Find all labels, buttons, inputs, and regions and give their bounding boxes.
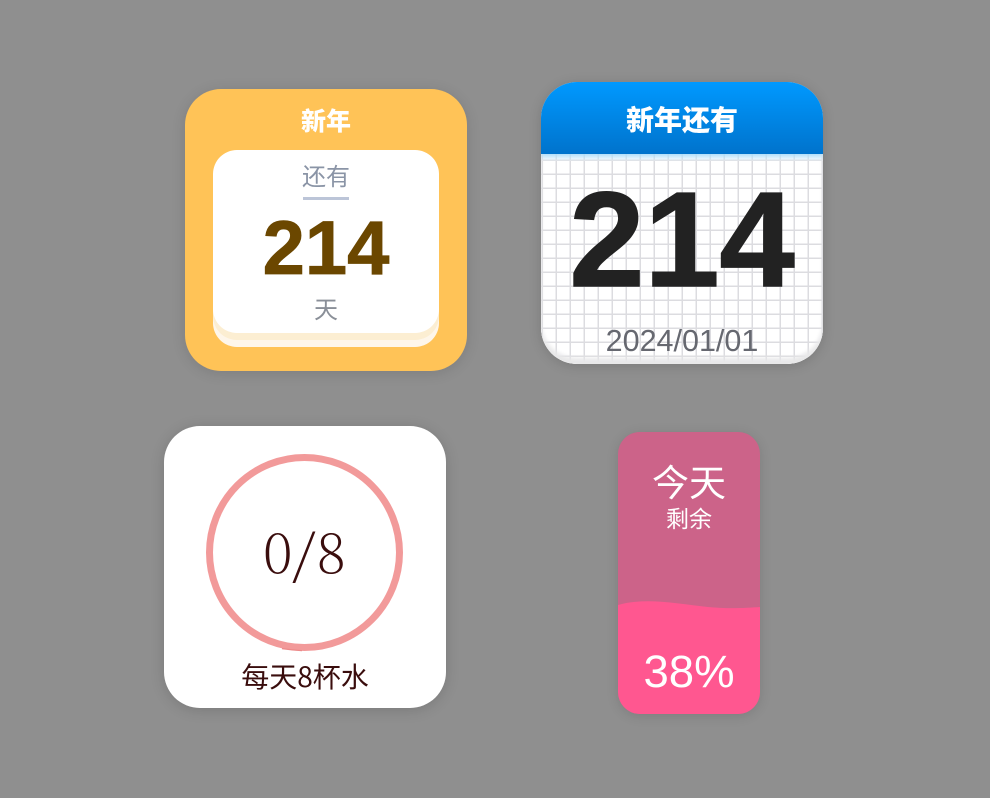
heading: today: 今天 (652, 453, 726, 507)
count: 0 of 8: / (293, 511, 316, 590)
progress ring (206, 454, 403, 651)
panel: new year countdown card (185, 89, 467, 371)
header glow (541, 154, 823, 161)
panel: water tracker card (164, 426, 446, 708)
calendar header (541, 82, 823, 154)
panel: calendar card (541, 82, 823, 364)
number: 214 days: 214 (263, 206, 389, 291)
label: 8 glasses a day: 每天8杯水 (241, 656, 369, 696)
percentage: 38% (643, 646, 735, 697)
count: 0 of 8: 0 8 (263, 512, 346, 589)
panel: day remaining card (618, 432, 760, 714)
stacked paper layer: middle (213, 273, 439, 340)
underline (303, 197, 349, 200)
calendar grid paper (541, 154, 823, 364)
date: 2024/01/01 (606, 324, 758, 358)
progress arc tick (282, 648, 302, 652)
stacked paper layer: back (213, 279, 439, 347)
label: remaining: 剩余 (666, 500, 712, 534)
heading: days until new year: 新年还有 (626, 99, 738, 139)
label: days: 天 (314, 290, 338, 325)
wave fill (618, 601, 760, 714)
panel: white countdown sheet (213, 150, 439, 333)
label: remaining: 还有 (302, 157, 350, 192)
calendar bottom edge (541, 82, 823, 364)
heading: new year: 新年 (301, 102, 351, 138)
number: 214: 214 (569, 164, 795, 315)
